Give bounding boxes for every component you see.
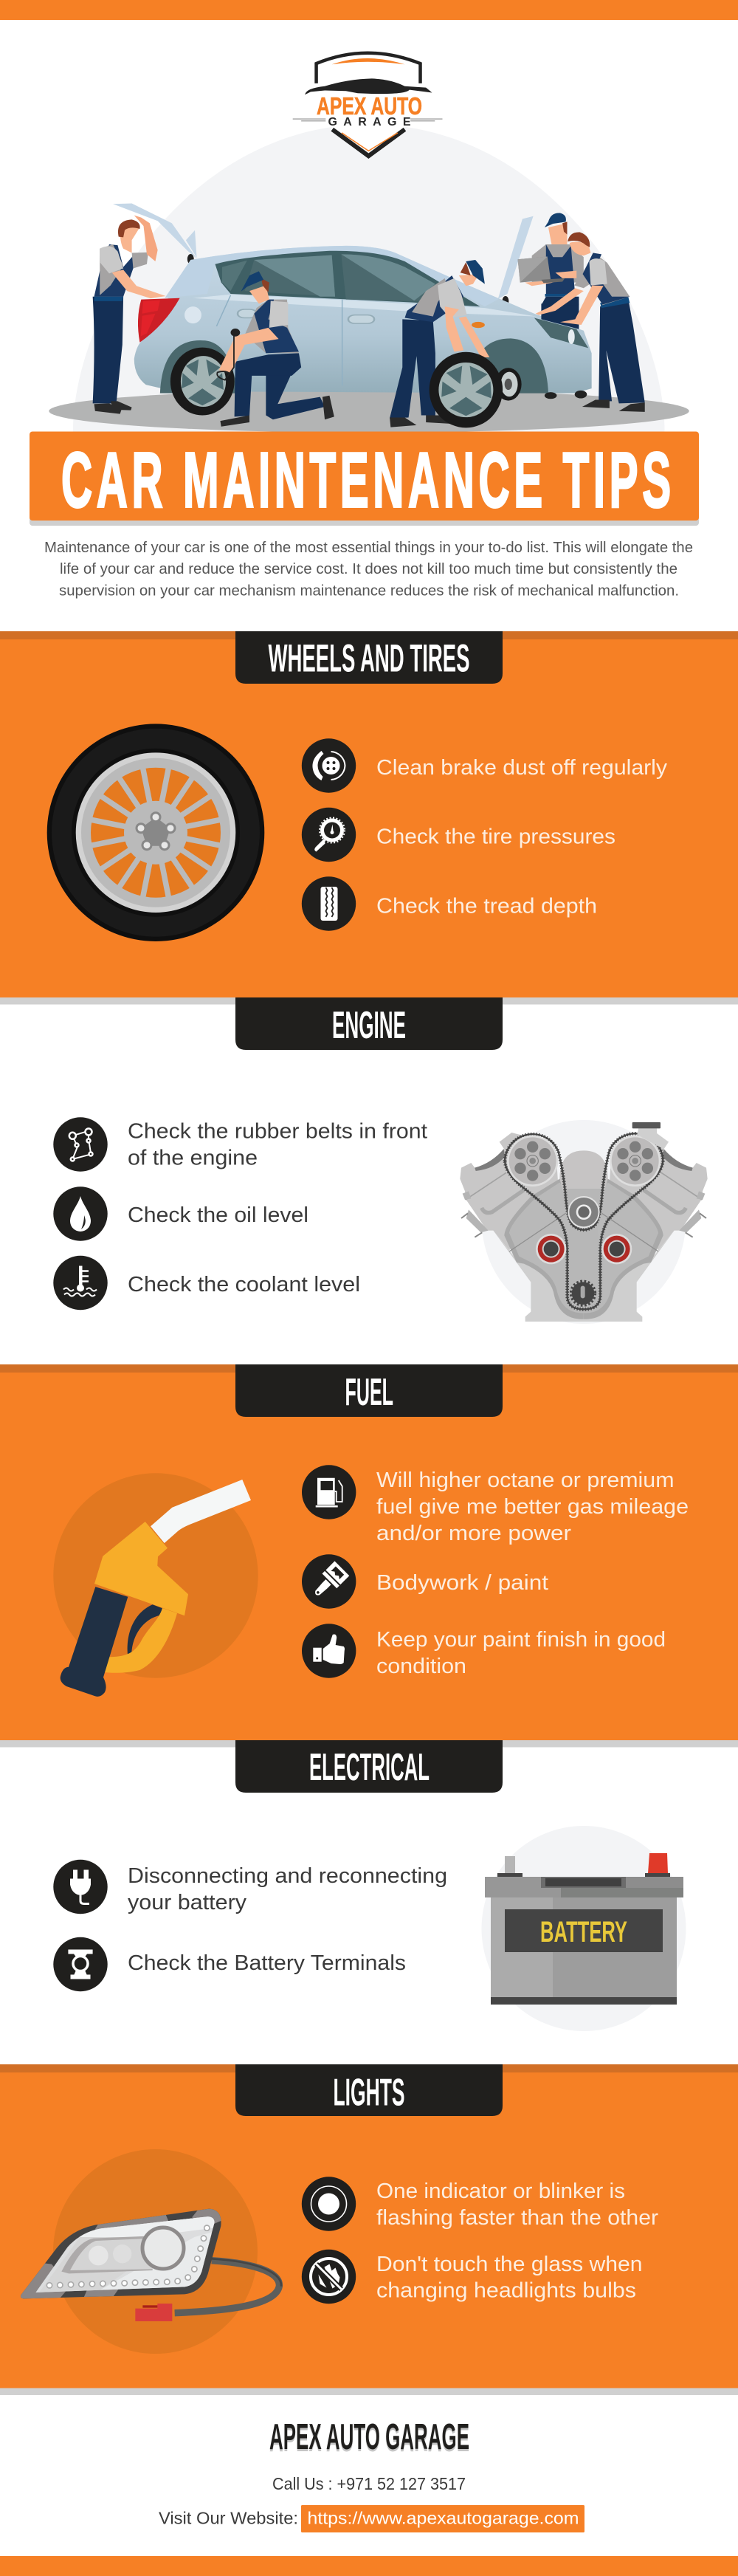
pulleys [507,1136,558,1186]
title: CAR MAINTENANCE TIPS [61,437,671,524]
headlight connector [135,2309,172,2321]
headlight wire [175,2261,279,2313]
brake disc [495,368,522,401]
hero illustration: mechanics working on a car [49,53,689,433]
text: glass: Don't touch the glass when [376,2253,642,2276]
text: tread depth: Check the tread depth [376,895,597,918]
icon: oil drop [53,1186,108,1241]
car rear light [138,298,180,343]
illustration: headlight [15,2149,281,2354]
footer brand: APEX AUTO GARAGE [269,2417,469,2457]
headlight housing [21,2209,221,2298]
worker 2 kneeling [217,271,334,427]
car door lines and handles [216,295,342,385]
heading tab: wheels and tires: WHEELS AND TIRES [269,636,469,681]
heading tab: electrical [235,1740,503,1793]
text: higher octane: and/or more power [376,1522,571,1545]
car trunk lid [113,204,197,258]
text: glass [376,2253,642,2302]
icon: coolant [53,1256,108,1310]
heading tab: lights [235,2064,503,2116]
text: paint finish [376,1628,666,1678]
panel: electrical [53,1740,686,2031]
wheel arches [160,340,238,394]
icon: paint brush [291,1543,368,1620]
icon: battery terminal [53,1937,108,1991]
text: coolant level: Check the coolant level [128,1273,360,1296]
illustration: engine [460,1120,708,1324]
icon: brake disc [302,738,356,793]
illustration: fuel nozzle [53,1473,258,1697]
icon: belts [53,1117,108,1172]
car feet [545,392,556,399]
intro paragraph: life of your car and reduce the service cost. It does not kill too much time but consistently the [60,561,677,577]
illustration: battery [481,1826,686,2031]
icon: indicator [302,2177,356,2231]
icon: do not touch [302,2250,356,2304]
held tyre [430,352,503,427]
text: indicator: flashing faster than the other [376,2206,658,2230]
rear wheel [170,348,235,415]
worker 1 at trunk [93,216,165,414]
worker 4 with laptop [518,213,584,329]
battery label: BATTERY [540,1916,627,1948]
text: rubber belts [128,1119,427,1169]
text: indicator: One indicator or blinker is [376,2180,625,2203]
text: indicator [376,2180,658,2230]
heading tab: electrical: ELECTRICAL [309,1746,430,1789]
icon: plug [53,1860,108,1914]
text: disconnecting: Disconnecting and reconnecting [128,1864,447,1888]
car windows [215,251,480,306]
engine block [460,1133,708,1322]
title banner [30,431,699,526]
text: clean brake dust: Clean brake dust off regularly [376,756,668,780]
oil cap [637,1128,669,1150]
text: paint finish: Keep your paint finish in good [376,1628,666,1652]
panel: lights [0,2064,738,2395]
heading tab: engine [235,997,503,1050]
icon: tread [302,876,356,931]
panel: wheels and tires [0,631,738,1004]
icon: thumbs up [302,1624,356,1678]
text: paint finish: condition [376,1655,466,1678]
car body [134,246,592,394]
phone: Call Us : +971 52 127 3517 [272,2474,466,2493]
icon: fuel pump [302,1465,356,1519]
text: tire pressures: Check the tire pressures [376,825,615,849]
text: higher octane [376,1469,689,1545]
heading tab: engine: ENGINE [332,1004,406,1047]
logo name: APEX AUTO [317,92,422,120]
text: disconnecting [128,1864,447,1914]
illustration: wheel [47,724,264,941]
text: oil level: Check the oil level [128,1203,308,1227]
website link: https://www.apexautogarage.com [307,2509,579,2528]
top orange band [0,0,738,20]
icon: tire gauge [302,808,356,862]
worker 5 leaning over engine [536,232,645,412]
heading tab: lights: LIGHTS [334,2072,404,2115]
logo [293,53,442,157]
text: disconnecting: your battery [128,1891,247,1914]
text: rubber belts: Check the rubber belts in front [128,1119,427,1143]
logo sub name: GARAGE [328,116,411,128]
heading tab: fuel [235,1364,503,1417]
heading tab: wheels and tires [235,631,503,684]
intro paragraph: Maintenance of your car is one of the most essential things in your to-do list. This will elongate the [44,540,693,556]
text: battery terminals: Check the Battery Terminals [128,1951,406,1975]
bottom orange band [0,2556,738,2576]
worker 3 with tyre [390,260,503,427]
logo wordmark [317,92,422,128]
text: rubber belts: of the engine [128,1146,258,1169]
website link [301,2505,584,2532]
ground shadow [49,390,689,433]
car hood [498,216,534,299]
text: higher octane: Will higher octane or premium [376,1469,675,1492]
website label: Visit Our Website: [159,2509,298,2528]
intro paragraph [44,540,693,600]
text: glass: changing headlights bulbs [376,2278,636,2302]
footer [159,2417,584,2532]
car headlight and indicator [534,317,588,348]
text: bodywork: Bodywork / paint [376,1571,548,1595]
timing belt [505,1133,663,1309]
intro paragraph: supervision on your car mechanism maintenance reduces the risk of mechanical malfunction. [59,583,679,600]
heading tab: fuel: FUEL [345,1371,393,1414]
panel: fuel [0,1364,738,1747]
background dome [73,124,665,432]
panel: engine [53,997,708,1324]
text: higher octane: fuel give me better gas mileage [376,1495,689,1519]
